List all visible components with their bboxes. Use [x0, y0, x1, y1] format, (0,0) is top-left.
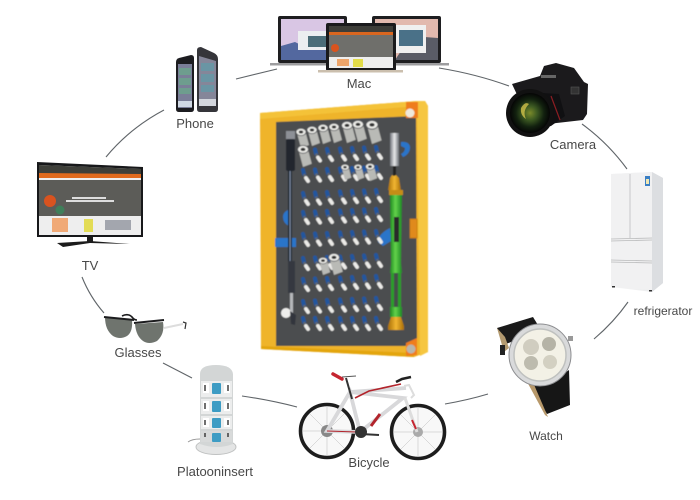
- bicycle drawing: [300, 374, 444, 458]
- label: Bicycle: Bicycle: [348, 455, 390, 470]
- device: Mac: [270, 16, 449, 91]
- label: refrigerator: refrigerator: [634, 304, 692, 318]
- label: Phone: Phone: [176, 116, 214, 131]
- device: TV: [37, 162, 143, 273]
- device: Glasses: [104, 315, 186, 360]
- device: Platooninsert: [177, 365, 253, 479]
- device: refrigerator: [611, 172, 692, 318]
- device: Camera: [506, 63, 597, 152]
- device: Bicycle: [300, 374, 444, 470]
- label: Mac: Mac: [347, 76, 372, 91]
- green screwdriver: [388, 133, 404, 330]
- sunglasses: [104, 315, 186, 343]
- power tower: [188, 365, 236, 454]
- central toolkit: [260, 101, 428, 357]
- wristwatch: [497, 317, 573, 417]
- label: Camera: Camera: [550, 137, 597, 152]
- label: Watch: Watch: [529, 429, 563, 443]
- bit rows: [303, 147, 381, 329]
- label: Glasses: Glasses: [115, 345, 162, 360]
- centre laptop: [318, 23, 403, 72]
- label: Platooninsert: Platooninsert: [177, 464, 253, 479]
- device: Phone: [176, 47, 218, 131]
- connector lines: [82, 68, 628, 407]
- label: TV: TV: [82, 258, 99, 273]
- fridge: [611, 172, 663, 292]
- camera: [506, 63, 588, 137]
- left long driver: [281, 131, 296, 325]
- television: [37, 162, 143, 247]
- phones: [176, 47, 218, 112]
- toolkit case: [260, 101, 428, 357]
- device: Watch: [497, 317, 573, 443]
- left laptop: [270, 16, 347, 66]
- right laptop: [372, 16, 449, 66]
- blue clips: [275, 142, 410, 247]
- sockets: [296, 120, 382, 275]
